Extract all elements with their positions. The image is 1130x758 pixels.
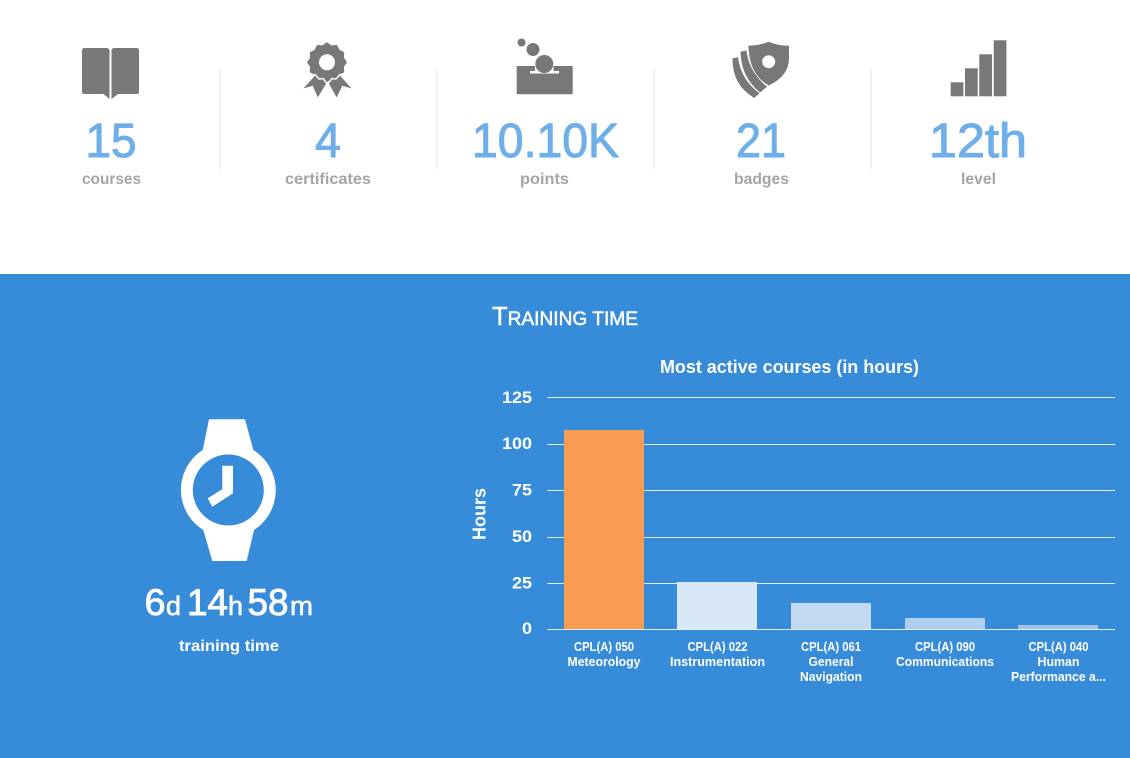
panel: training time xyxy=(0,274,1130,758)
stat label: badges: badges xyxy=(734,171,789,188)
icon: wristwatch xyxy=(181,419,276,561)
chart title: Most active courses (in hours) xyxy=(660,357,919,377)
total training time value: m xyxy=(290,591,313,621)
panel: level stat xyxy=(929,40,1027,188)
bar chart: most active courses xyxy=(470,357,1115,684)
heading: training time: TRAINING TIME xyxy=(492,301,638,331)
x label: general navigation: General xyxy=(808,655,854,669)
x label: communications xyxy=(896,640,994,669)
y axis labels: 50 xyxy=(512,527,532,546)
x label: human performance: Human xyxy=(1038,655,1080,669)
bar: meteorology xyxy=(564,430,644,629)
x label: communications: CPL(A) 090 xyxy=(915,640,975,654)
stat value: badges: 21 xyxy=(736,115,786,168)
icon: award rosette xyxy=(301,42,354,99)
y axis labels: 125 xyxy=(502,388,532,407)
panel: courses stat xyxy=(82,48,141,188)
total training time value: d xyxy=(166,591,181,621)
training time caption: training time xyxy=(179,638,279,655)
stat label: courses: courses xyxy=(82,171,141,188)
x label: human performance: Performance a... xyxy=(1011,670,1106,684)
y axis labels xyxy=(502,388,532,638)
stat value: level: 12th xyxy=(929,115,1027,168)
y axis labels: 25 xyxy=(512,574,532,592)
y axis labels: 100 xyxy=(502,434,532,453)
x label: general navigation: Navigation xyxy=(800,670,862,684)
x label: instrumentation: Instrumentation xyxy=(670,655,765,669)
x label: meteorology xyxy=(568,640,641,669)
bar: instrumentation xyxy=(677,582,757,629)
stat label: certificates: certificates xyxy=(285,171,371,188)
x label: meteorology: Meteorology xyxy=(568,655,641,669)
panel: points stat xyxy=(472,38,619,188)
total training time value: 6 xyxy=(144,582,166,623)
y axis labels: 0 xyxy=(522,619,532,638)
stat label: level: level xyxy=(961,171,996,188)
x label: general navigation: CPL(A) 061 xyxy=(801,640,861,654)
x label: general navigation xyxy=(800,640,862,684)
x label: human performance: CPL(A) 040 xyxy=(1028,640,1089,654)
y axis title: Hours xyxy=(470,488,490,540)
x label: instrumentation: CPL(A) 022 xyxy=(688,640,748,654)
stat value: points: 10.10K xyxy=(472,115,619,168)
y axis labels: 75 xyxy=(512,480,532,500)
total training time value: 14 xyxy=(187,582,228,623)
stat label: points: points xyxy=(520,171,569,188)
icon: rising level bars xyxy=(951,40,1006,96)
stat value: certificates: 4 xyxy=(315,115,341,168)
stat value: courses: 15 xyxy=(86,115,136,168)
bar: communications xyxy=(905,618,985,629)
x label: human performance xyxy=(1011,640,1106,684)
x label: instrumentation xyxy=(670,640,765,669)
bar: human performance xyxy=(1018,625,1098,629)
icon: coins dropping into box xyxy=(517,38,573,94)
icon: layered shield xyxy=(732,42,789,98)
total training time value xyxy=(144,582,313,623)
total training time value: 58 xyxy=(248,582,288,623)
panel: certificates stat xyxy=(285,42,371,188)
bar: general navigation xyxy=(791,603,871,629)
total training time value: h xyxy=(228,591,243,621)
x label: communications: Communications xyxy=(896,655,994,669)
icon: open book xyxy=(82,48,139,99)
panel: badges stat xyxy=(732,42,789,188)
x label: meteorology: CPL(A) 050 xyxy=(574,640,634,654)
